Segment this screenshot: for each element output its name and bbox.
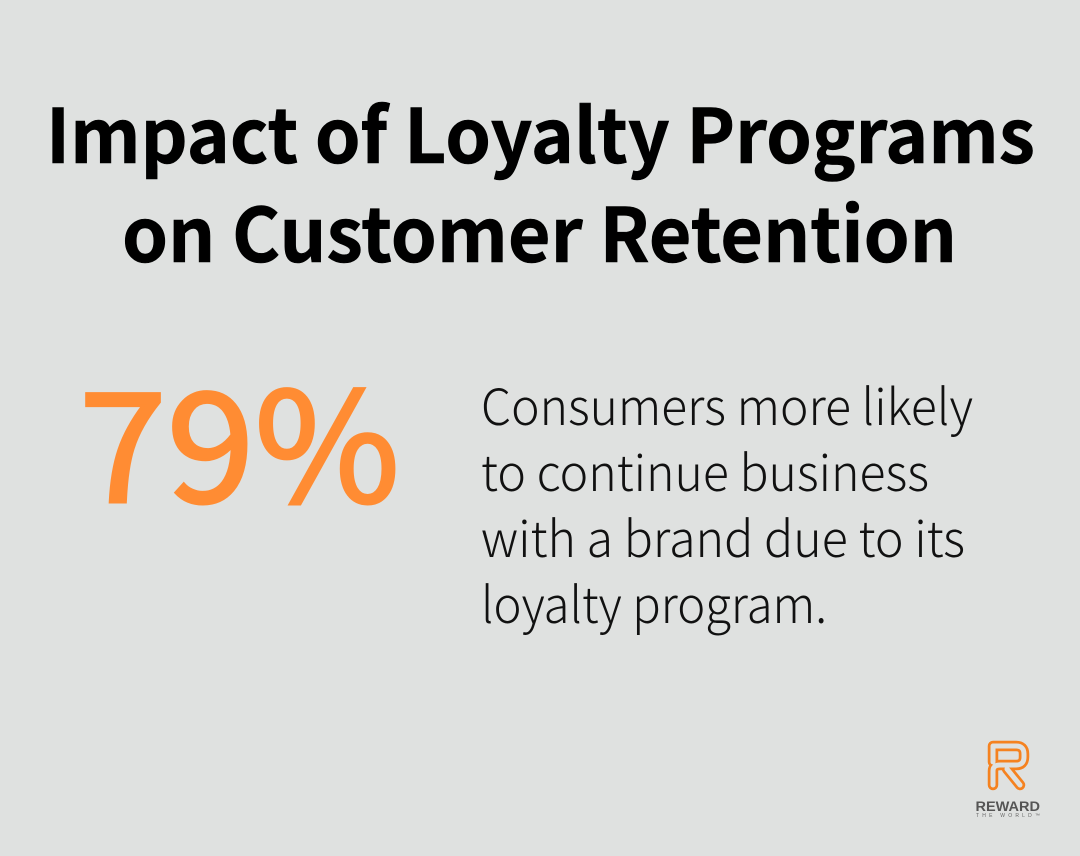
tagline: THE WORLD™: [976, 813, 1040, 819]
title: [46, 76, 1035, 284]
statistic description: Consumers more likely: [481, 368, 973, 440]
statistic description: with a brand due to its: [481, 500, 965, 572]
title: on Customer Retention: [122, 175, 957, 284]
logo: Reward the World: [976, 746, 1040, 819]
statistic description: [481, 368, 973, 638]
statistic: 79%: 79%: [79, 326, 400, 546]
statistic description: loyalty program.: [481, 566, 827, 638]
title: Impact of Loyalty Programs: [46, 76, 1035, 185]
wordmark: REWARD: [976, 799, 1040, 814]
icon: R mark: [993, 746, 1024, 785]
statistic description: to continue business: [481, 434, 929, 506]
